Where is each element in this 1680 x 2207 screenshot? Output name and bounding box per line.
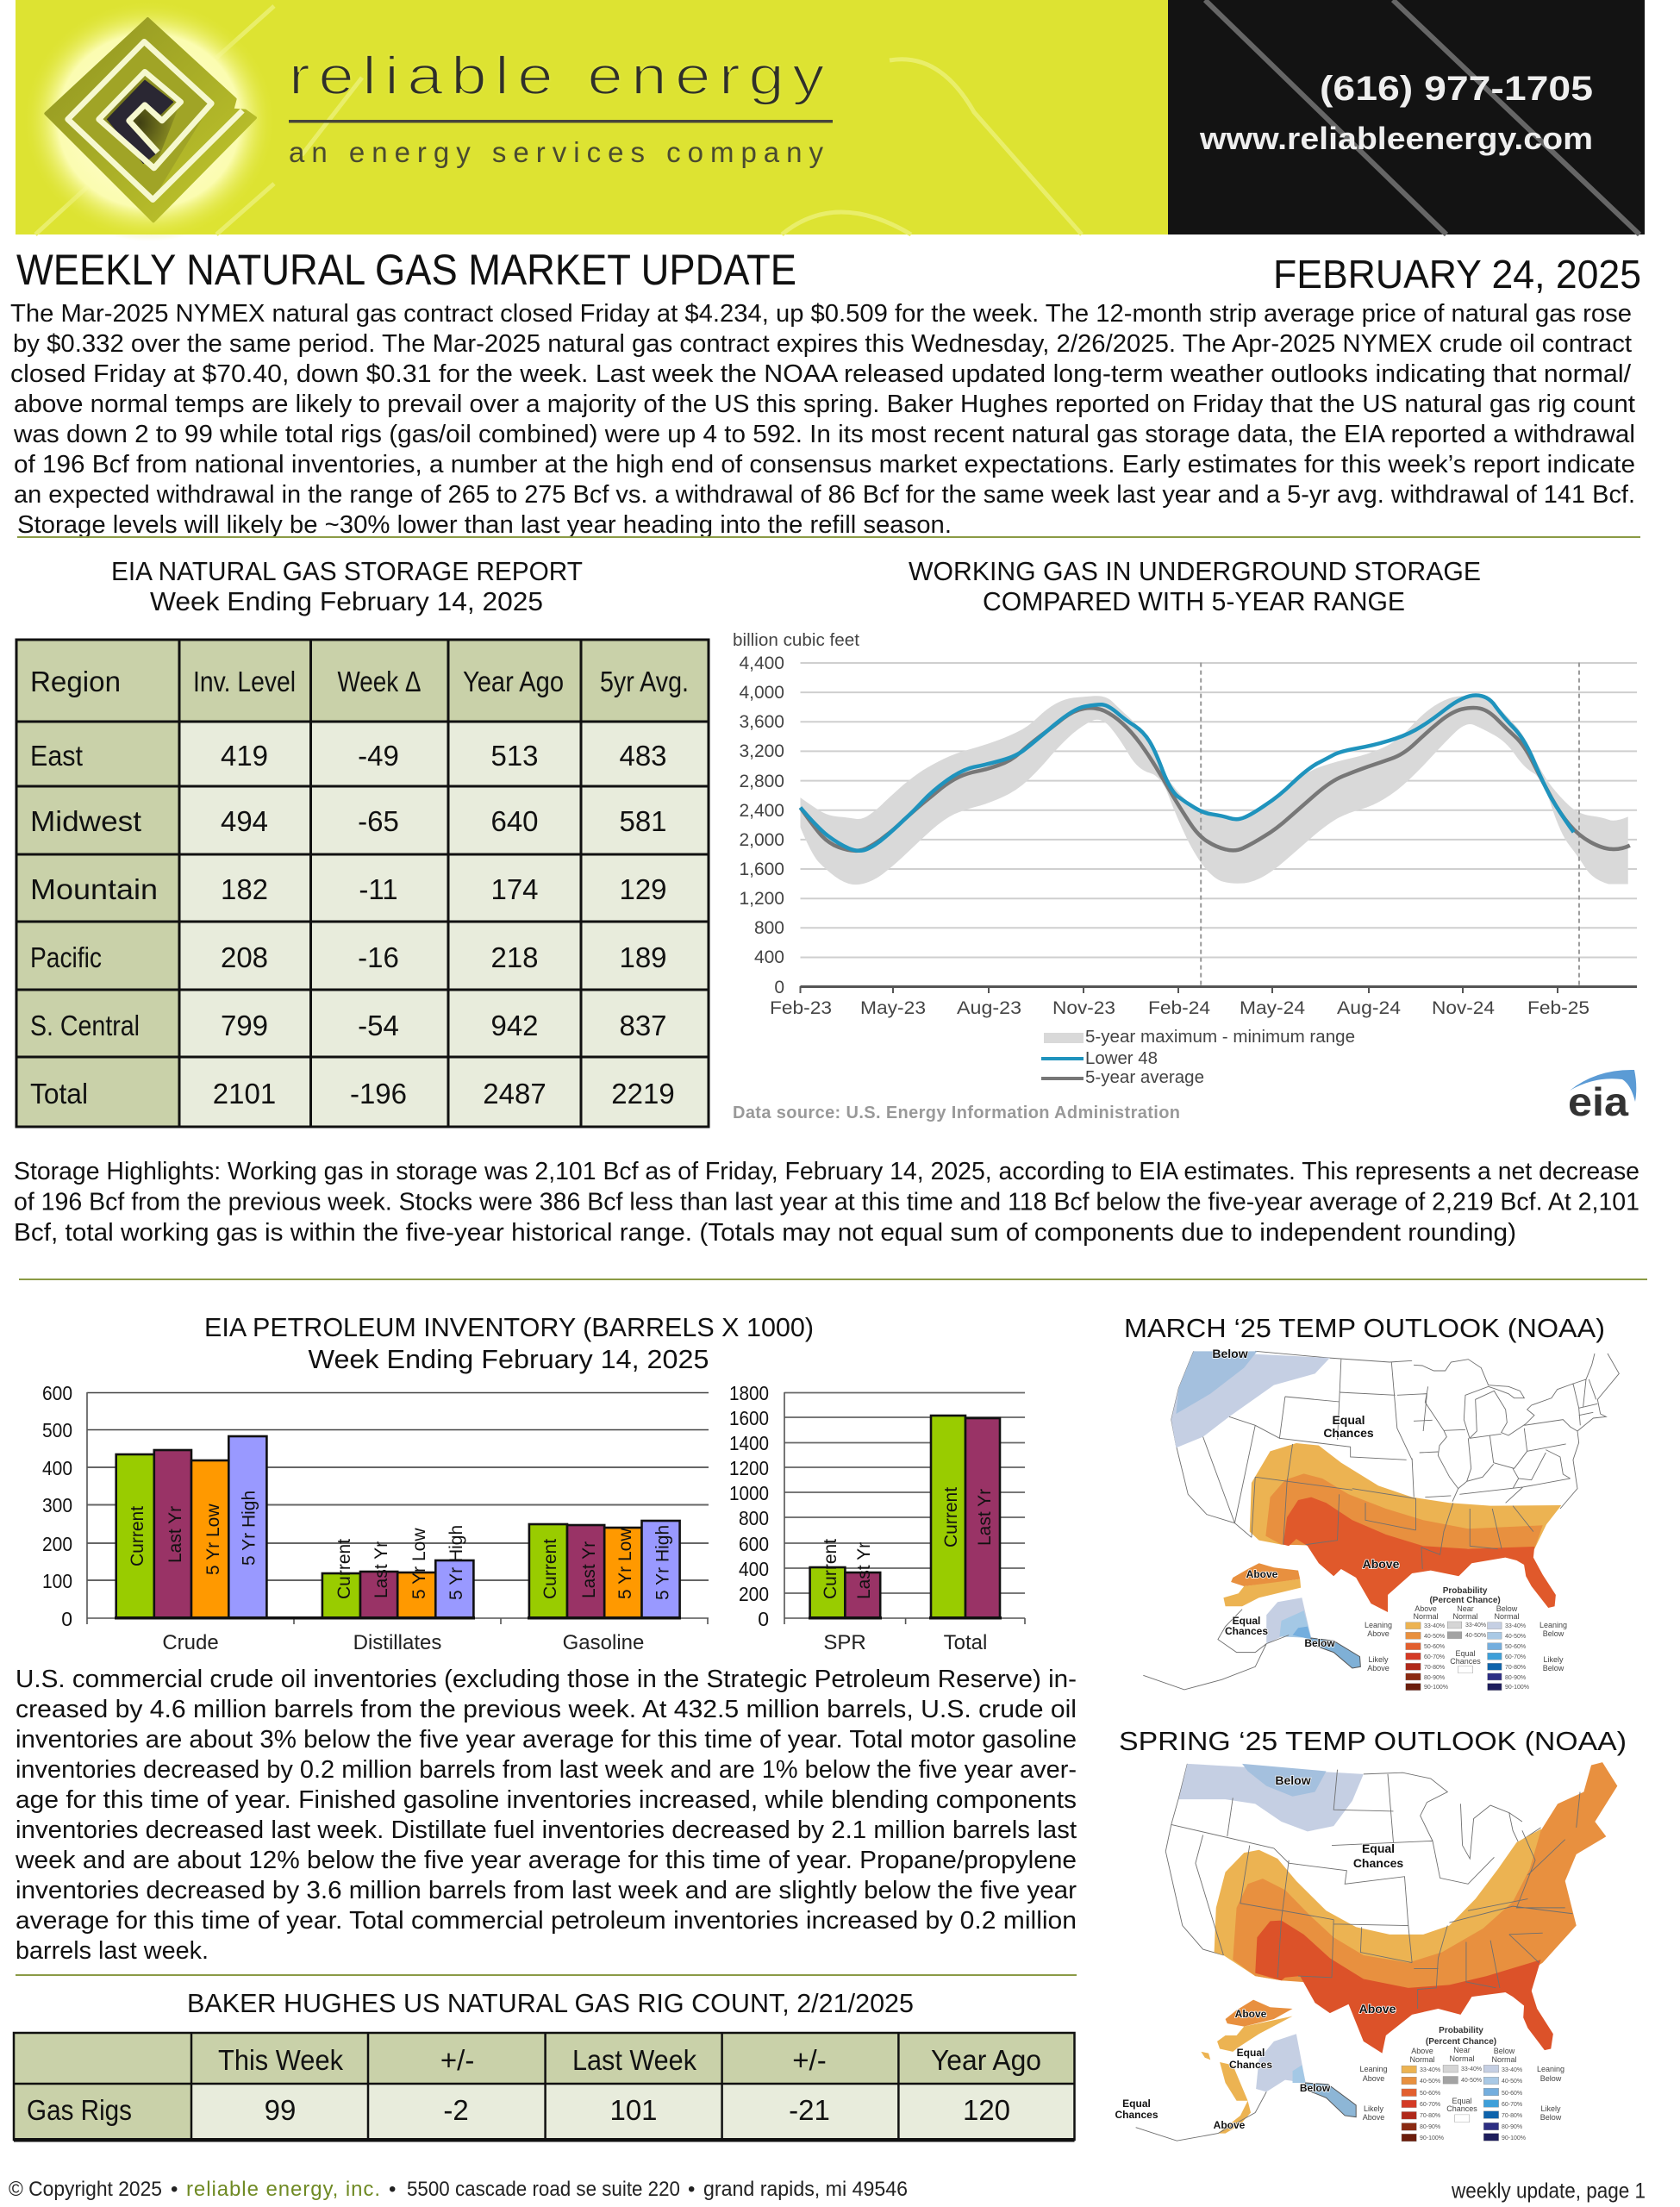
map legend: Probability [1439,2026,1483,2035]
map: spring temperature outlook: Equal [1237,2047,1265,2059]
intro text block [10,300,1635,539]
crude bars [116,1436,266,1618]
bar chart: SPR and total: 0 [758,1608,769,1630]
map legend: Above [1415,1604,1437,1613]
storage highlights text: Storage Highlights: Working gas in storage was 2,101 Bcf as of Friday, February 14, 2025, according to EIA estimates. This represents a net decrease [14,1158,1639,1185]
map legend: 40-50% [1461,2078,1482,2084]
map legend: 40-50% [1420,2079,1440,2085]
table: storage by region: Mountain [30,873,158,905]
line chart: working gas in storage: Feb-23 [770,998,832,1018]
map: march temperature outlook: Below [1212,1347,1248,1360]
table: storage by region: -16 [358,941,399,973]
map: spring temperature outlook: Above [1235,2008,1267,2020]
map legend: Likely [1364,2104,1384,2113]
line chart: working gas in storage: 3,600 [739,712,784,732]
chart legend: 5-year maximum - minimum range [1085,1028,1355,1047]
map legend: Near [1457,1604,1474,1613]
icon: eia logo [1568,1070,1636,1124]
map legend: 90-100% [1505,1685,1529,1691]
map legend: 70-80% [1505,1665,1526,1671]
map legend: Below [1496,1604,1518,1613]
line chart: working gas in storage: 0 [774,978,784,997]
table: storage by region: -196 [350,1078,407,1110]
map legend: Chances [1450,1657,1481,1666]
five year average line [801,708,1630,851]
table: storage by region: -11 [359,873,398,905]
line chart: working gas in storage: Aug-23 [957,998,1021,1018]
table: storage by region: 182 [221,873,268,905]
map legend: Chances [1446,2104,1477,2113]
petroleum commentary text: inventories decreased last week. Distillate fuel inventories decreased by 2.1 million barrels last [16,1816,1077,1844]
bar chart: SPR and total [729,1382,1025,1654]
map legend: 50-60% [1502,2091,1522,2097]
petroleum commentary text: week and are about 12% below the five year average for this time of year. Propane/propylene [15,1847,1077,1874]
map: march temperature outlook: Equal [1233,1615,1260,1627]
bar chart: SPR and total: 800 [739,1507,769,1529]
line chart: working gas in storage: May-23 [860,998,926,1018]
table: storage by region: 218 [490,941,539,973]
five year range band [801,696,1628,885]
tagline: an energy services company [289,136,823,168]
bar chart: SPR and total: Total [944,1631,987,1654]
bar chart: crude distillates gasoline: 5 Yr Low [409,1528,429,1599]
table: storage by region [16,640,709,1127]
bar chart: crude distillates gasoline: 200 [42,1533,72,1555]
intro text block: closed Friday at $70.40, down $0.31 for the week. Last week the NOAA released updated long-term weather outlooks indicating that normal/ [10,360,1632,388]
table: storage by region: Region [30,666,121,697]
heading: storage report: Week Ending February 14, 2025 [150,586,543,616]
map legend [1365,1586,1567,1691]
chart legend: Lower 48 [1085,1049,1158,1068]
table: storage by region: East [30,740,83,772]
bar chart: crude distillates gasoline: Last Yr [166,1506,185,1563]
heading: petroleum inventory [204,1312,814,1374]
heading: working gas chart: WORKING GAS IN UNDERGROUND STORAGE [909,556,1481,586]
map legend: 33-40% [1465,1622,1486,1629]
table: rig count: -2 [443,2094,469,2126]
map legend: 33-40% [1505,1623,1526,1629]
map: spring temperature outlook: Equal [1122,2098,1151,2110]
table: rig count: Last Week [572,2044,696,2076]
map legend: 90-100% [1502,2135,1526,2141]
bar chart: crude distillates gasoline: Current [334,1539,354,1599]
petroleum commentary text: barrels last week. [16,1937,209,1965]
bar chart: crude distillates gasoline: Last Yr [372,1541,391,1598]
lower 48 line [801,696,1574,851]
table: storage by region: 799 [221,1010,268,1041]
bar chart: crude distillates gasoline: 5 Yr High [447,1525,466,1600]
line chart: working gas in storage: 2,800 [739,772,784,791]
petroleum commentary text: average for this time of year. Total commercial petroleum inventories increased by 0.2 million [16,1907,1077,1935]
line chart: working gas in storage: billion cubic feet [733,631,859,650]
map legend: 40-50% [1505,1634,1526,1640]
map legend: Below [1543,1629,1564,1638]
intro text block: The Mar-2025 NYMEX natural gas contract closed Friday at $4.234, up $0.509 for the week. The 12-month strip average price of natural gas rose [10,300,1632,328]
map: spring temperature outlook: Below [1275,1773,1311,1787]
heading: working gas chart [909,556,1481,616]
bar chart: SPR and total: 1800 [729,1382,769,1404]
map legend: 40-50% [1465,1633,1486,1639]
line chart: working gas in storage: May-24 [1240,998,1305,1018]
date: FEBRUARY 24, 2025 [1273,252,1641,297]
banner header [16,0,1645,241]
map legend: 60-70% [1424,1654,1445,1660]
line chart: working gas in storage: Feb-24 [1148,998,1210,1018]
table: storage by region: -54 [358,1010,399,1041]
map legend: Above [1411,2047,1433,2055]
map legend: 60-70% [1420,2102,1440,2108]
line chart: working gas in storage: 4,000 [739,683,784,703]
table: storage by region: -49 [358,740,399,772]
data source: Data source: U.S. Energy Information Administration [733,1104,1180,1122]
footer address line: • [389,2178,396,2201]
bar chart: crude distillates gasoline: 500 [42,1419,72,1441]
map legend: 80-90% [1424,1675,1445,1681]
line chart: working gas in storage [733,631,1637,1124]
line chart: working gas in storage: 400 [754,947,784,967]
map legend: 60-70% [1502,2102,1522,2108]
table: rig count: Gas Rigs [27,2094,132,2126]
map legend: 33-40% [1502,2067,1522,2073]
table: storage by region: Inv. Level [193,666,296,697]
line chart: working gas in storage: Nov-24 [1432,998,1495,1018]
bar chart: crude distillates gasoline: 5 Yr High [653,1525,672,1600]
table: storage by region: 513 [490,740,539,772]
banner lime panel [16,0,1168,234]
chart legend: 5-year average [1085,1068,1204,1087]
table: rig count: -21 [789,2094,830,2126]
map: spring temperature outlook: Above [1214,2119,1246,2131]
map: spring temperature outlook: Below [1300,2082,1331,2094]
map legend: Equal [1455,1649,1476,1658]
map legend: 90-100% [1420,2135,1444,2141]
map legend: Likely [1543,1655,1564,1664]
footer address line: grand rapids, mi 49546 [703,2178,908,2201]
line chart: working gas in storage: 800 [754,918,784,938]
line chart: working gas in storage: Nov-23 [1052,998,1115,1018]
footer address line: • [688,2178,695,2201]
map: march temperature outlook: Equal [1332,1413,1365,1427]
table: storage by region: 208 [221,941,268,973]
storage highlights text: Bcf, total working gas is within the five-year historical range. (Totals may not equal sum of components due to independent rounding) [14,1219,1516,1247]
table: rig count: 99 [265,2094,296,2126]
bar chart: crude distillates gasoline [42,1382,709,1654]
footer address line: • [171,2178,178,2201]
storage highlights text: of 196 Bcf from the previous week. Stocks were 386 Bcf less than last year at this time and 118 Bcf below the five-year average of 2,219 Bcf. At 2,101 [14,1188,1639,1216]
heading: petroleum inventory: Week Ending February 14, 2025 [309,1344,709,1374]
bar chart: crude distillates gasoline: 5 Yr Low [203,1504,223,1575]
intro text block: above normal temps are likely to prevail over a majority of the US this spring. Baker Hughes reported on Friday that the US natural gas rig count [14,391,1635,418]
chart legend [1041,1028,1355,1087]
map legend: Near [1453,2046,1471,2054]
table: rig count: +/- [792,2044,827,2076]
map legend: Normal [1413,1612,1439,1621]
bar chart: SPR and total: Current [821,1539,840,1599]
bar chart: crude distillates gasoline: Current [128,1506,147,1566]
map legend: Normal [1494,1612,1520,1621]
intro text block: an expected withdrawal in the range of 265 to 275 Bcf vs. a withdrawal of 86 Bcf for the same week last year and a 5-yr avg. withdrawal of 141 Bcf. [14,481,1635,509]
map legend: (Percent Chance) [1426,2037,1496,2047]
petroleum commentary text: inventories decreased by 0.2 million barrels from last week and are 1% below the five year aver- [16,1756,1077,1784]
table: storage by region: 2101 [213,1078,276,1110]
map legend: 70-80% [1424,1665,1445,1671]
map legend: Leaning [1537,2065,1564,2073]
table: storage by region: 2219 [611,1078,675,1110]
map legend: Leaning [1539,1621,1567,1629]
table: storage by region: 174 [490,873,539,905]
line chart: working gas in storage: Feb-25 [1527,998,1589,1018]
map: march temperature outlook: Below [1304,1637,1335,1649]
table: storage by region: 483 [619,740,667,772]
line chart: working gas in storage: 2,000 [739,830,784,850]
map: spring temperature outlook: Chances [1353,1856,1403,1870]
petroleum commentary text: creased by 4.6 million barrels from the previous week. At 432.5 million barrels, U.S. crude oil [16,1696,1077,1723]
bar chart: crude distillates gasoline: 600 [42,1382,72,1404]
bar chart: SPR and total: SPR [823,1631,866,1654]
map legend: 80-90% [1502,2124,1522,2130]
map legend: Below [1543,1664,1564,1672]
bar chart: SPR and total: 200 [739,1583,769,1605]
map legend [1359,2026,1564,2141]
table: rig count: Year Ago [931,2044,1041,2076]
table: storage by region: 2487 [483,1078,546,1110]
table: storage by region: 837 [619,1010,667,1041]
map legend: 50-60% [1420,2091,1440,2097]
table: storage by region: 942 [490,1010,539,1041]
map: spring temperature outlook: Equal [1362,1841,1395,1855]
footer address line [9,2178,908,2201]
table: rig count: This Week [218,2044,343,2076]
line chart: working gas in storage: 1,600 [739,860,784,879]
bar chart: crude distillates gasoline: 400 [42,1457,72,1479]
footer address line: 5500 cascade road se suite 220 [407,2178,680,2201]
intro text block: Storage levels will likely be ~30% lower than last year heading into the refill season. [17,511,952,539]
intro text block: of 196 Bcf from national inventories, a number at the high end of consensus market expectations. Early estimates for this week’s report indicate [14,451,1635,478]
table: storage by region: 189 [619,941,667,973]
bar chart: SPR and total: 1400 [729,1432,769,1454]
table: storage by region: 494 [221,805,268,837]
phone number: (616) 977-1705 [1320,70,1593,108]
storage highlights text [14,1158,1639,1247]
heading: spring outlook: SPRING ‘25 TEMP OUTLOOK (NOAA) [1119,1726,1627,1756]
bar chart: SPR and total: 1600 [729,1407,769,1429]
map legend: Leaning [1365,1621,1392,1629]
bar chart: crude distillates gasoline: Gasoline [563,1631,644,1654]
heading: storage report: EIA NATURAL GAS STORAGE REPORT [111,556,583,586]
bar chart: crude distillates gasoline: Distillates [353,1631,441,1654]
map legend: 40-50% [1424,1634,1445,1640]
bar chart: SPR and total: 600 [739,1533,769,1555]
map legend: Above [1367,1664,1390,1672]
gasoline bars [529,1521,680,1618]
map legend: Above [1363,2074,1384,2083]
map legend: 40-50% [1502,2079,1522,2085]
table: storage by region: Week Δ [338,666,421,697]
page number: weekly update, page 1 [1451,2179,1646,2204]
table: storage by region: Total [30,1078,88,1110]
petroleum commentary text: inventories are about 3% below the five year average for this time of year. Total motor gasoline [16,1726,1077,1754]
line chart: working gas in storage: 4,400 [739,653,784,673]
table: rig count: 120 [963,2094,1010,2126]
map legend: (Percent Chance) [1429,1596,1501,1605]
map: spring temperature outlook: Above [1359,2002,1396,2016]
map legend: Probability [1443,1586,1488,1596]
bar chart: SPR and total: Last Yr [854,1542,874,1599]
footer address line: © Copyright 2025 [9,2178,162,2201]
table: storage by region: 419 [221,740,268,772]
title: WEEKLY NATURAL GAS MARKET UPDATE [16,246,796,294]
bar chart: crude distillates gasoline: Current [540,1539,560,1599]
table: rig count: 101 [609,2094,658,2126]
heading: working gas chart: COMPARED WITH 5-YEAR RANGE [983,586,1405,616]
table: storage by region: 640 [490,805,539,837]
map legend: Leaning [1359,2065,1388,2073]
banner black contact panel [1168,0,1645,234]
line chart: working gas in storage: 3,200 [739,741,784,761]
bar chart: SPR and total: Current [941,1487,961,1547]
bar chart: crude distillates gasoline: 5 Yr Low [615,1528,635,1599]
map legend: Above [1367,1629,1390,1638]
line chart: working gas in storage: 1,200 [739,889,784,909]
map legend: 70-80% [1502,2113,1522,2119]
map legend: 50-60% [1424,1644,1445,1650]
intro text block: was down 2 to 99 while total rigs (gas/oil combined) were up 4 to 592. In its most recent natural gas storage data, the EIA reported a withdrawal [13,421,1635,448]
map legend: Above [1363,2113,1384,2122]
bar chart: crude distillates gasoline: 0 [61,1608,72,1630]
map legend: 80-90% [1420,2124,1440,2130]
petroleum commentary text: inventories decreased by 3.6 million barrels from last week and are slightly below the five year [16,1877,1077,1904]
map: march temperature outlook [1143,1347,1619,1691]
heading: march outlook: MARCH ‘25 TEMP OUTLOOK (NOAA) [1124,1313,1605,1343]
map legend: Normal [1449,2054,1475,2063]
petroleum commentary text: U.S. commercial crude oil inventories (excluding those in the Strategic Petroleum Reserve) in- [16,1666,1077,1693]
bar chart: crude distillates gasoline: Crude [162,1631,219,1654]
icon: eia logo: eia [1568,1079,1628,1124]
table: storage by region: S. Central [30,1010,140,1041]
map: spring temperature outlook: Chances [1229,2059,1272,2071]
table: storage by region: -65 [358,805,399,837]
map legend: Below [1540,2074,1562,2083]
petroleum commentary text [15,1666,1077,1965]
table: storage by region: 129 [619,873,667,905]
map legend: 70-80% [1420,2113,1440,2119]
footer address line: reliable energy, inc. [186,2178,380,2201]
map legend: 33-40% [1461,2066,1482,2073]
map legend: Below [1540,2113,1562,2122]
intro text block: by $0.332 over the same period. The Mar-2025 natural gas contract expires this Wednesday, 2/26/2025. The Apr-2025 NYMEX crude oil contract [13,330,1632,358]
table: storage by region: Midwest [30,805,141,837]
table: storage by region: 5yr Avg. [600,666,689,697]
table: storage by region: Pacific [30,941,102,973]
bar chart: SPR and total: 1000 [729,1482,769,1504]
distillates bars [322,1560,473,1618]
map legend: 50-60% [1505,1644,1526,1650]
line chart: working gas in storage: Aug-24 [1337,998,1401,1018]
map legend: 90-100% [1424,1685,1448,1691]
petroleum commentary text: age for this time of year. Finished gasoline inventories increased, while blending components [16,1786,1077,1814]
bar chart: crude distillates gasoline: Last Yr [579,1541,599,1598]
map legend: Normal [1409,2055,1435,2064]
line chart: working gas in storage: 2,400 [739,801,784,821]
map: march temperature outlook: Above [1363,1557,1400,1571]
map: march temperature outlook: Chances [1225,1625,1268,1637]
bar chart: SPR and total: 400 [739,1558,769,1580]
bar chart: SPR and total: 1200 [729,1457,769,1479]
map legend: 33-40% [1420,2067,1440,2073]
map legend: Likely [1540,2104,1561,2113]
map legend: Below [1494,2047,1515,2055]
bar chart: crude distillates gasoline: 5 Yr High [240,1491,259,1566]
heading: storage report [111,556,583,616]
table: storage by region: Year Ago [463,666,564,697]
website: www.reliableenergy.com [1199,121,1593,156]
map: spring temperature outlook: Chances [1115,2109,1159,2121]
map legend: 60-70% [1505,1654,1526,1660]
table: rig count: +/- [440,2044,474,2076]
table: storage by region: 581 [619,805,667,837]
heading: petroleum inventory: EIA PETROLEUM INVENTORY (BARRELS X 1000) [204,1312,814,1342]
map legend: Normal [1452,1612,1478,1621]
bar chart: crude distillates gasoline: 300 [42,1494,72,1516]
bar chart: SPR and total: Last Yr [975,1489,995,1546]
map: march temperature outlook: Chances [1323,1426,1374,1440]
map: march temperature outlook: Above [1246,1568,1278,1580]
table: rig count [14,2033,1074,2141]
map legend: 80-90% [1505,1675,1526,1681]
map: spring temperature outlook [1115,1762,1617,2141]
logo wordmark: reliable energy [289,47,833,106]
heading: rig count: BAKER HUGHES US NATURAL GAS RIG COUNT, 2/21/2025 [187,1988,914,2018]
bar chart: crude distillates gasoline: 100 [42,1570,72,1592]
map legend: Equal [1452,2097,1472,2105]
great lakes and eastern state lines [1414,1354,1619,1509]
map legend: 33-40% [1424,1623,1445,1629]
map legend: Likely [1368,1655,1389,1664]
icon: spiral diamond logo [22,0,276,241]
map legend: Normal [1491,2055,1517,2064]
